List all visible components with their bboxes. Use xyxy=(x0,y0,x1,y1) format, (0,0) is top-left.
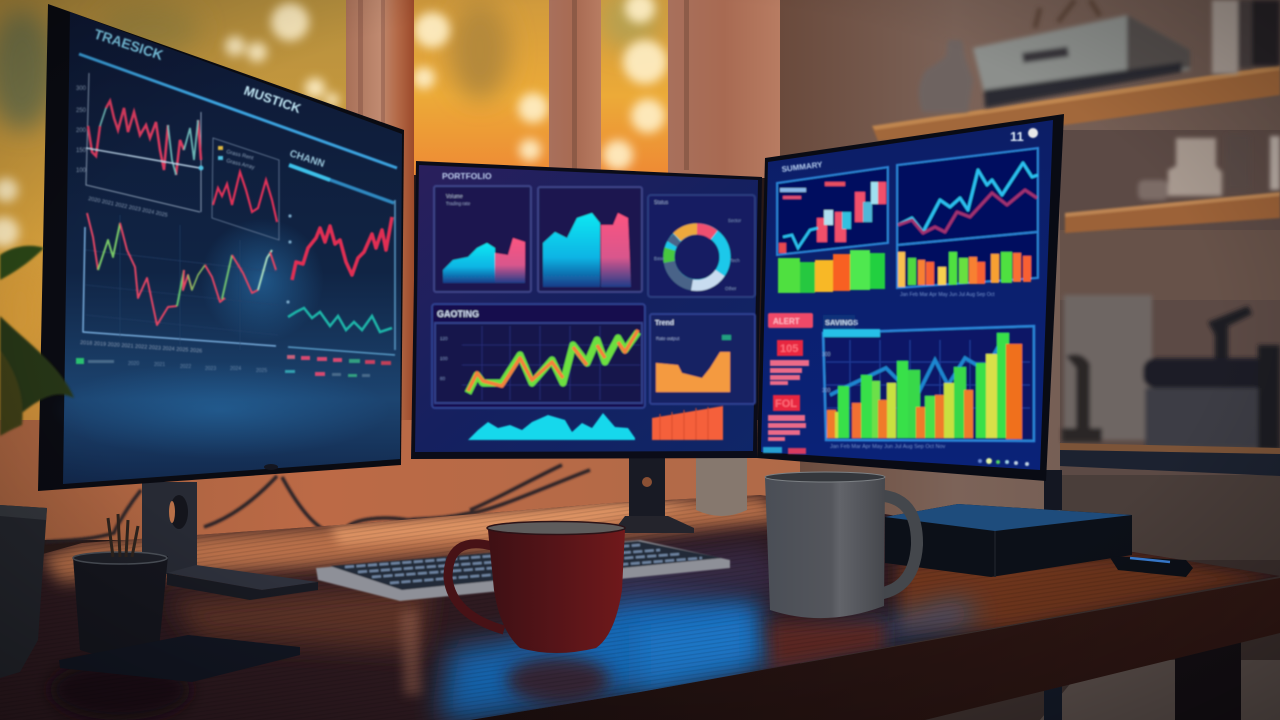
panel: donut chart: Base xyxy=(654,256,665,261)
right monitor xyxy=(757,114,1064,481)
icon: sticks above device xyxy=(1035,0,1100,28)
second shelf xyxy=(1065,192,1280,233)
panel: ribbon line chart: 80 xyxy=(440,376,446,381)
panel: ribbon line chart: 120 xyxy=(440,336,448,341)
right monitor stand xyxy=(1044,470,1062,510)
panel: area chart two xyxy=(538,187,642,292)
left monitor stand xyxy=(142,482,318,600)
grey mug xyxy=(765,472,917,618)
legend strip: 2022 xyxy=(180,364,191,370)
left monitor xyxy=(38,4,404,491)
desk surface xyxy=(0,480,1280,720)
legend strip: 2021 xyxy=(154,362,165,368)
heading: channel: CHANN xyxy=(288,148,326,170)
warm back of desk xyxy=(40,495,790,582)
legend strip: 2018 2019 2020 2021 2022 2023 2024 2025 2026 xyxy=(80,340,202,355)
panel: area chart one: Volume xyxy=(446,194,463,200)
heading: Traesick: TRAESICK xyxy=(92,26,165,63)
plant leaves in front of monitor xyxy=(0,246,74,436)
multi-colour bars row: Jan Feb Mar Apr May Jun Jul Aug Sep Oct xyxy=(900,292,995,298)
green and orange bars row xyxy=(778,250,885,293)
legend strip: 2023 xyxy=(205,366,216,372)
panel: donut chart xyxy=(648,195,755,297)
mug reflections xyxy=(506,656,610,704)
chart: small red inset: Grass Rent xyxy=(226,149,254,162)
header rule xyxy=(79,54,397,168)
curtains and window frames xyxy=(346,0,780,420)
panel: ribbon line chart: 100 xyxy=(440,356,448,361)
chart: small red inset: Grass Array xyxy=(226,158,255,171)
pen cup xyxy=(73,514,168,657)
panel: large bar chart: SAVINGS xyxy=(825,318,858,327)
panel: wave lines xyxy=(897,148,1038,288)
lower shelf xyxy=(1060,443,1280,476)
panel: orange bars: Rate output xyxy=(656,336,680,341)
panel: large bar chart: Jan Feb Mar Apr May Jun Jul Aug Sep Oct Nov xyxy=(830,444,945,450)
lower wall behind desk xyxy=(0,420,800,540)
panel: orange bars: Trend xyxy=(655,320,674,327)
chart: top-left price line: 100 xyxy=(76,168,87,174)
heading: Summary: SUMMARY xyxy=(781,160,824,174)
panel: candlesticks xyxy=(777,167,888,255)
panel: red-orange bars xyxy=(652,406,723,440)
top-right status: 11 xyxy=(1010,129,1024,144)
keyboard xyxy=(316,540,730,601)
chart: large multi-colour line xyxy=(83,213,278,350)
floor and table leg xyxy=(800,560,1280,720)
red mug xyxy=(448,522,625,653)
panel: area chart one: Trading rate xyxy=(446,201,471,206)
panel: large bar chart xyxy=(822,315,1034,450)
chart: top-left price line: 2020 2021 2022 2023 2024 2025 xyxy=(88,196,168,219)
legend strip: 2020 xyxy=(128,361,139,367)
window with autumn bokeh xyxy=(0,0,670,430)
power indicator xyxy=(264,464,278,470)
panel: donut chart: Sector xyxy=(728,218,742,223)
ceramic cup behind desk xyxy=(696,458,747,516)
legend strip: 2024 xyxy=(230,366,241,372)
panel: area chart one xyxy=(434,186,531,292)
panel: sidebar alerts: 105 xyxy=(780,343,798,355)
legend strip: 2025 xyxy=(256,368,267,374)
chart: top-left price line: 300 xyxy=(76,86,87,92)
usb stick xyxy=(1109,556,1193,577)
brown mid desk xyxy=(170,585,430,650)
icon: books xyxy=(1212,0,1280,74)
icon: shelf ornaments xyxy=(1138,135,1280,200)
chart: small red inset xyxy=(212,138,279,240)
panel: ribbon line chart: GAOTING xyxy=(437,309,479,319)
middle monitor xyxy=(411,161,762,459)
heading: Mustick: MUSTICK xyxy=(242,83,303,116)
plant pot xyxy=(0,505,47,678)
blue reflection xyxy=(440,590,980,720)
screen xyxy=(63,12,402,484)
legend strip xyxy=(76,340,391,377)
right wall xyxy=(780,0,1280,560)
panel: ribbon line chart xyxy=(432,304,645,408)
status dots xyxy=(978,458,1029,466)
cables xyxy=(35,465,590,585)
icon: vase xyxy=(919,40,973,112)
panel: sidebar alerts: FOL xyxy=(775,398,797,410)
panel: large bar chart: 200 xyxy=(822,388,831,394)
chart: top-left price line xyxy=(76,73,204,219)
icon: audio device xyxy=(973,15,1190,108)
shelf objects xyxy=(919,0,1280,200)
chart: right panel red line and teal line xyxy=(286,165,395,355)
panel: sidebar alerts: ALERT xyxy=(773,317,800,326)
panel: donut chart: Other xyxy=(725,286,737,291)
chart: top-left price line: 250 xyxy=(76,108,87,114)
heading: Portfolio: PORTFOLIO xyxy=(442,171,492,181)
router box xyxy=(885,504,1132,577)
wall below shelves xyxy=(1060,130,1280,580)
lower right equipment xyxy=(1062,295,1280,450)
panel: donut chart: Tech xyxy=(730,258,740,263)
teal area strip xyxy=(468,413,635,440)
top shelf xyxy=(872,65,1280,141)
panel: sidebar alerts xyxy=(763,313,813,454)
middle monitor stand xyxy=(612,455,694,533)
chart: top-left price line: 200 xyxy=(76,128,87,134)
coaster xyxy=(59,635,300,682)
panel: orange bars xyxy=(650,314,755,404)
chart: top-left price line: 150 xyxy=(76,148,87,154)
panel: large bar chart: 300 xyxy=(822,352,831,358)
panel: donut chart: Status xyxy=(654,200,669,206)
multi-colour bars row xyxy=(898,252,1031,298)
